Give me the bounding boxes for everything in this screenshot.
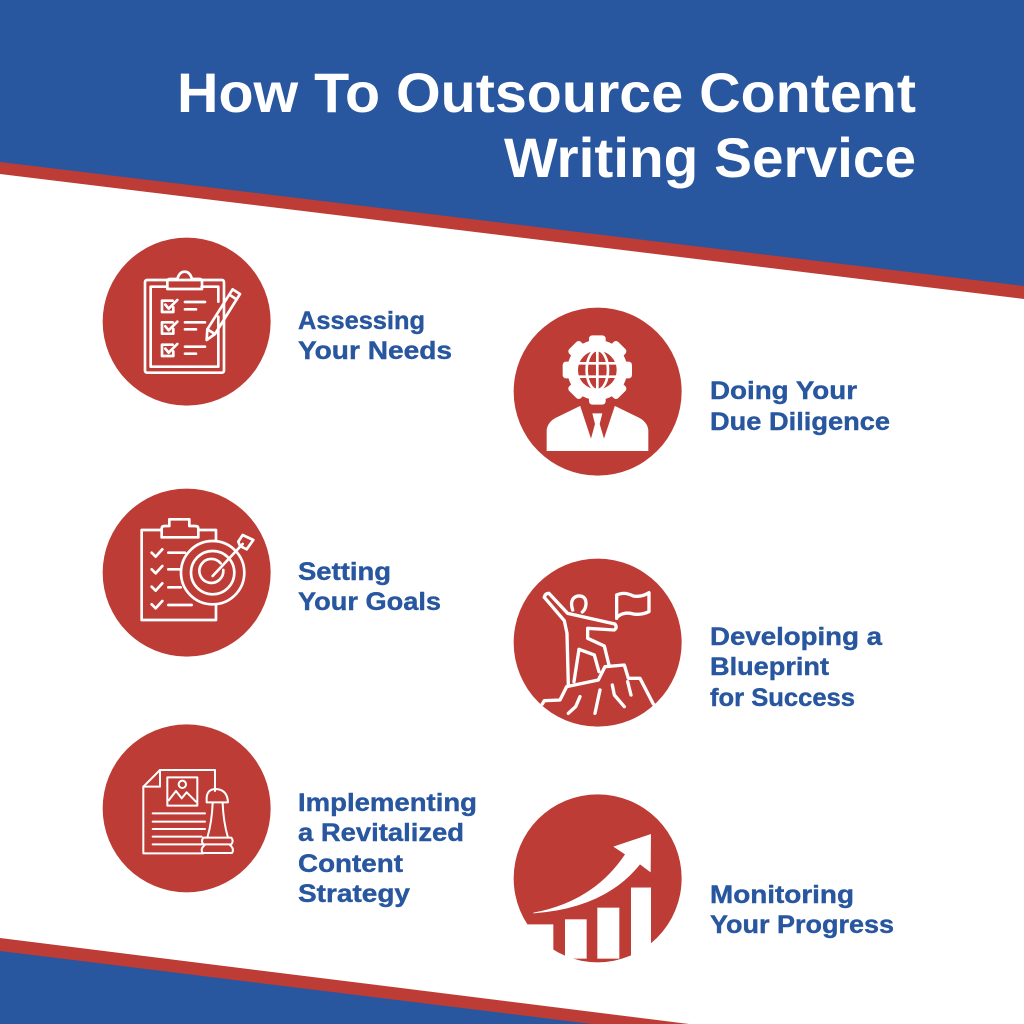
- title: [177, 61, 916, 189]
- label: Assessing Your Needs: Your Needs: [298, 337, 452, 365]
- label: Doing Your Due Diligence: Due Diligence: [710, 408, 890, 436]
- footer banner: [0, 938, 689, 1024]
- icon: rising bar chart with arrow: [514, 794, 682, 962]
- label: Developing a Blueprint for Success: for Success: [710, 684, 855, 712]
- label: Monitoring Your Progress: Monitoring: [710, 881, 854, 909]
- label: Implementing a Revitalized Content Strategy: Content: [298, 850, 404, 878]
- label: Setting Your Goals: Your Goals: [298, 588, 441, 616]
- icon: clipboard with target: [103, 489, 271, 657]
- label: Developing a Blueprint for Success: Developing a: [710, 623, 883, 651]
- label: Developing a Blueprint for Success: Blueprint: [710, 653, 830, 681]
- label: Monitoring Your Progress: Your Progress: [710, 911, 894, 939]
- label: Implementing a Revitalized Content Strategy: Strategy: [298, 880, 410, 908]
- title: How To Outsource Content: [177, 61, 916, 124]
- label: Doing Your Due Diligence: Doing Your: [710, 377, 857, 405]
- icon: businessman with gear globe head: [514, 308, 682, 476]
- header banner: [0, 0, 1024, 299]
- label: Assessing Your Needs: [298, 307, 452, 365]
- label: Implementing a Revitalized Content Strategy: a Revitalized: [298, 819, 464, 847]
- label: Setting Your Goals: Setting: [298, 558, 391, 586]
- label: Implementing a Revitalized Content Strategy: Implementing: [298, 789, 477, 817]
- label: Monitoring Your Progress: [710, 881, 894, 939]
- label: Assessing Your Needs: Assessing: [298, 307, 425, 335]
- label: Developing a Blueprint for Success: [710, 623, 883, 712]
- label: Implementing a Revitalized Content Strategy: [298, 789, 477, 908]
- icon: person with flag on mountain peak: [514, 559, 682, 727]
- title: Writing Service: [504, 126, 916, 189]
- label: Doing Your Due Diligence: [710, 377, 890, 436]
- icon: clipboard checklist with pencil: [103, 238, 271, 406]
- label: Setting Your Goals: [298, 558, 441, 616]
- icon: document with chess pawn: [103, 724, 271, 892]
